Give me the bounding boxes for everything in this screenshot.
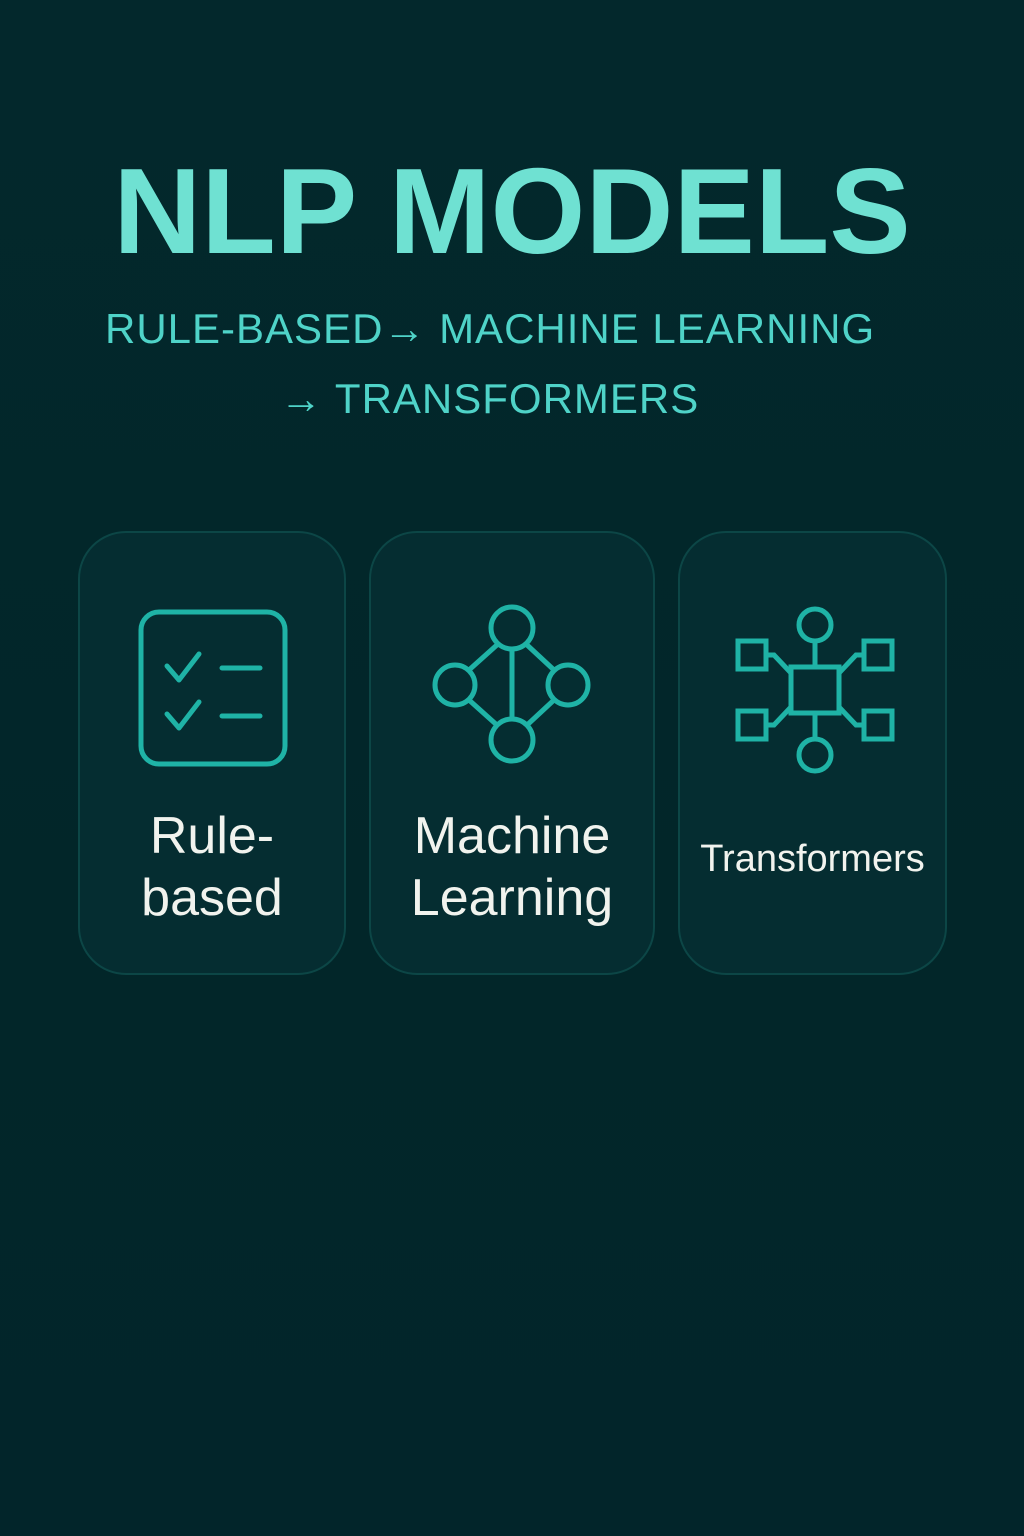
- title: NLP MODELS: [113, 143, 911, 279]
- panel: machine learning: [369, 531, 655, 975]
- icon: checklist: [138, 610, 288, 766]
- label: Transformers: [700, 838, 925, 880]
- icon: network diamond: [432, 604, 590, 764]
- label: based: [141, 869, 283, 927]
- panel: rule-based: [78, 531, 346, 975]
- subtitle line 1: RULE-BASED→ MACHINE LEARNING: [105, 305, 875, 352]
- icon: hub: [736, 606, 894, 774]
- label: [411, 807, 613, 927]
- label: Rule-: [150, 807, 274, 865]
- label: [141, 807, 283, 927]
- subtitle line 2: → TRANSFORMERS: [280, 375, 699, 422]
- label: Learning: [411, 869, 613, 927]
- panel: transformers: [678, 531, 947, 975]
- label: Machine: [414, 807, 610, 865]
